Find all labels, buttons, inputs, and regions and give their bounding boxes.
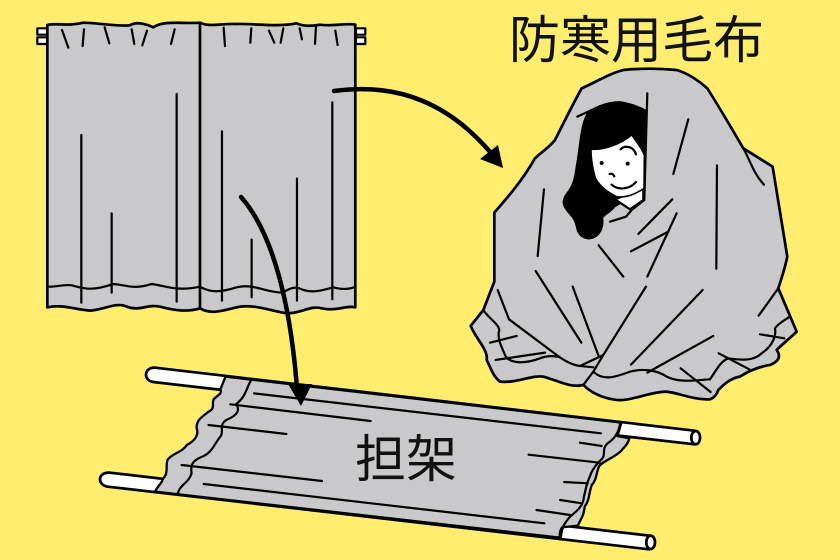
curtain long folds (81, 94, 332, 303)
face features (600, 147, 636, 188)
blanket inner hem (483, 310, 560, 362)
stretcher label: 担架 (355, 431, 457, 488)
stretcher right fold (561, 423, 620, 537)
stretcher pole end bottom (646, 536, 655, 549)
neck (615, 188, 643, 209)
blanket creases (490, 119, 784, 392)
blanket edge at face (610, 93, 647, 222)
face (591, 135, 644, 197)
stretcher pole end top (691, 431, 700, 444)
title: 防寒用毛布 (509, 12, 764, 69)
stretcher (100, 368, 700, 549)
stretcher bottom pole (100, 473, 649, 549)
curtain centre seam (199, 23, 201, 308)
stretcher top pole (146, 368, 695, 444)
stretcher crease lines (182, 393, 602, 523)
stretcher left fold (178, 380, 251, 494)
arrow: curtain to stretcher (241, 197, 312, 406)
blanket figure (471, 69, 797, 400)
curtain hem (47, 284, 355, 293)
blanket hood fold (577, 110, 592, 117)
stretcher cloth (155, 377, 629, 538)
curtain fabric (47, 23, 355, 313)
hair (563, 102, 647, 239)
curtain rod stubs (37, 28, 365, 44)
arrow: curtain to blanket (334, 89, 503, 168)
blanket (471, 69, 797, 400)
curtain top pleats (62, 27, 338, 48)
curtain (37, 23, 365, 313)
